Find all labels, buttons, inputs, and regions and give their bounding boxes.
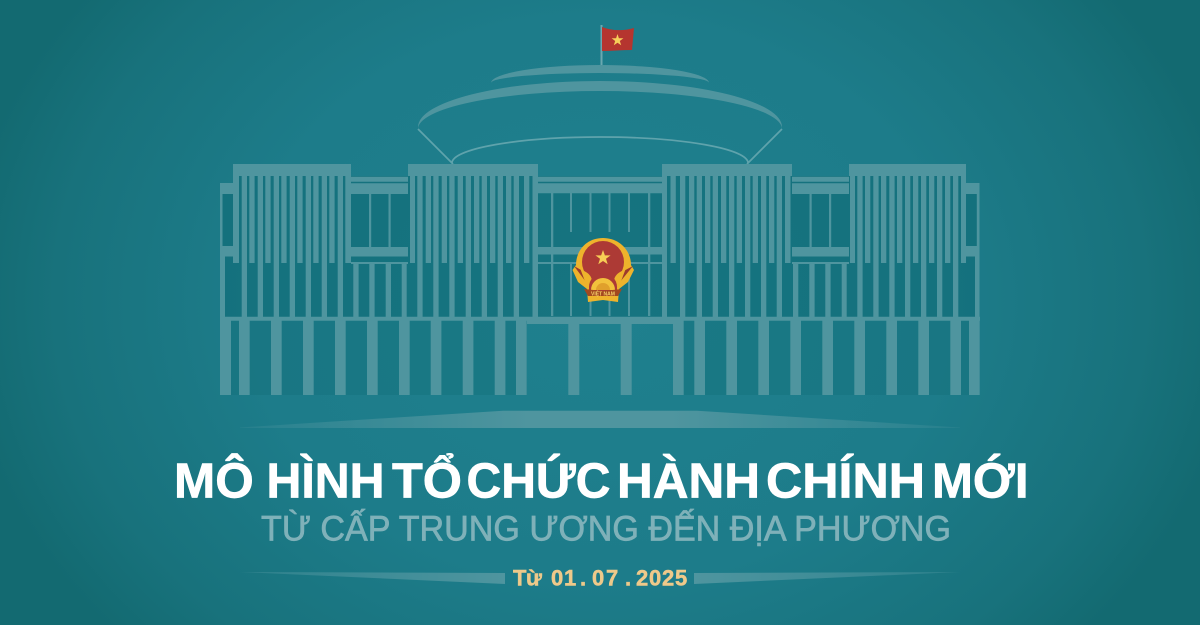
- national emblem: [572, 238, 634, 302]
- main title: HÀNH: [617, 454, 760, 508]
- right date divider: [694, 572, 960, 584]
- main title: CHÍNH: [766, 454, 925, 508]
- main title: MỚI: [932, 454, 1028, 508]
- left date divider: [240, 572, 505, 584]
- building backdrop: [222, 176, 978, 395]
- flag: [600, 25, 634, 65]
- illustration: national assembly building: [220, 25, 980, 428]
- main title: [174, 454, 1028, 508]
- main title: MÔ: [174, 454, 254, 508]
- subtitle: TỪ CẤP TRUNG ƯƠNG ĐẾN ĐỊA PHƯƠNG: [261, 509, 951, 549]
- building base plinth: [240, 411, 960, 428]
- facade upper: towers, fins, windows: [220, 164, 980, 317]
- dome roof: [418, 65, 782, 164]
- main title: CHỨC: [466, 454, 610, 508]
- facade lower: ground floor columns: [220, 317, 980, 395]
- effective date: Từ 01 . 07 . 2025: [513, 566, 687, 590]
- main title: HÌNH: [266, 454, 384, 508]
- main title: TỔ: [392, 454, 462, 508]
- national emblem: VIỆT NAM: [591, 290, 615, 298]
